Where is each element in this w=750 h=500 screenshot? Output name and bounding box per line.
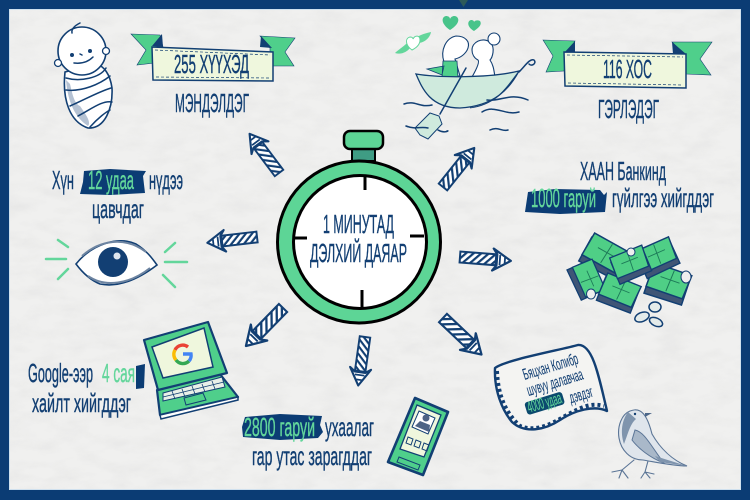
text: нүдээ — [149, 165, 183, 195]
label: 255 babies: 255 ХҮҮХЭД — [174, 49, 249, 79]
text: people blink 12 times: цавчдаг — [92, 194, 144, 224]
text: МЭНДЭЛДЭГ — [175, 88, 249, 118]
speech bubble: hummingbird fact: Бяцхан Колибр — [521, 351, 580, 384]
text: 2800+ smartphones sold: гар утас зарагддаг — [252, 441, 372, 471]
icon: smartphone — [388, 398, 448, 475]
heart clasp on the top edge — [459, 0, 468, 7]
text: people blink 12 times: 12 удаа — [88, 165, 134, 195]
title — [310, 209, 407, 268]
text: 2800+ smartphones sold — [242, 412, 374, 471]
text: 2800+ smartphones sold: ухаалаг — [325, 412, 374, 442]
icon: laptop with Google logo — [144, 322, 238, 419]
icon: money stacks and coins — [566, 230, 695, 329]
text: 4 million Google searches: Google-ээр — [28, 358, 93, 388]
icon: eye with rays — [46, 240, 187, 287]
banner: 116 couples — [543, 40, 712, 88]
icon: hummingbird — [612, 410, 687, 478]
text: 4 million Google searches: 4 сая — [102, 358, 135, 388]
text: 4 million Google searches — [28, 358, 145, 418]
speech bubble: hummingbird fact: 4000 удаа — [525, 390, 564, 417]
icon: Google G — [174, 345, 191, 364]
text: 2800+ smartphones sold: 2800 гаруй — [244, 412, 315, 442]
text: people blink 12 times: Хүн — [52, 165, 74, 195]
text: 4 million Google searches: хайлт хийгддэг — [32, 388, 131, 418]
text: 1000+ transactions — [525, 183, 714, 214]
icon: swaddled baby — [54, 23, 112, 128]
speech bubble: hummingbird fact: шувуу далавчаа — [525, 367, 585, 400]
text: 1000+ transactions: 1000 гаруй — [531, 183, 596, 213]
banner: 116 couples: 116 ХОС — [603, 54, 652, 84]
text: people blink 12 times — [52, 165, 183, 224]
icon: couple in a boat — [395, 16, 535, 139]
speech bubble: hummingbird fact — [495, 345, 607, 429]
stopwatch with title — [278, 131, 440, 323]
banner: 255 births — [131, 34, 295, 81]
title: 1 МИНУТАД — [323, 209, 394, 239]
speech bubble: hummingbird fact: дэвдэг — [567, 384, 595, 407]
stopwatch with title: ДЭЛХИЙ ДАЯАР — [310, 238, 407, 268]
text: ГЭРЛЭДЭГ — [598, 94, 659, 124]
arrows radiating from the stopwatch — [206, 128, 512, 387]
